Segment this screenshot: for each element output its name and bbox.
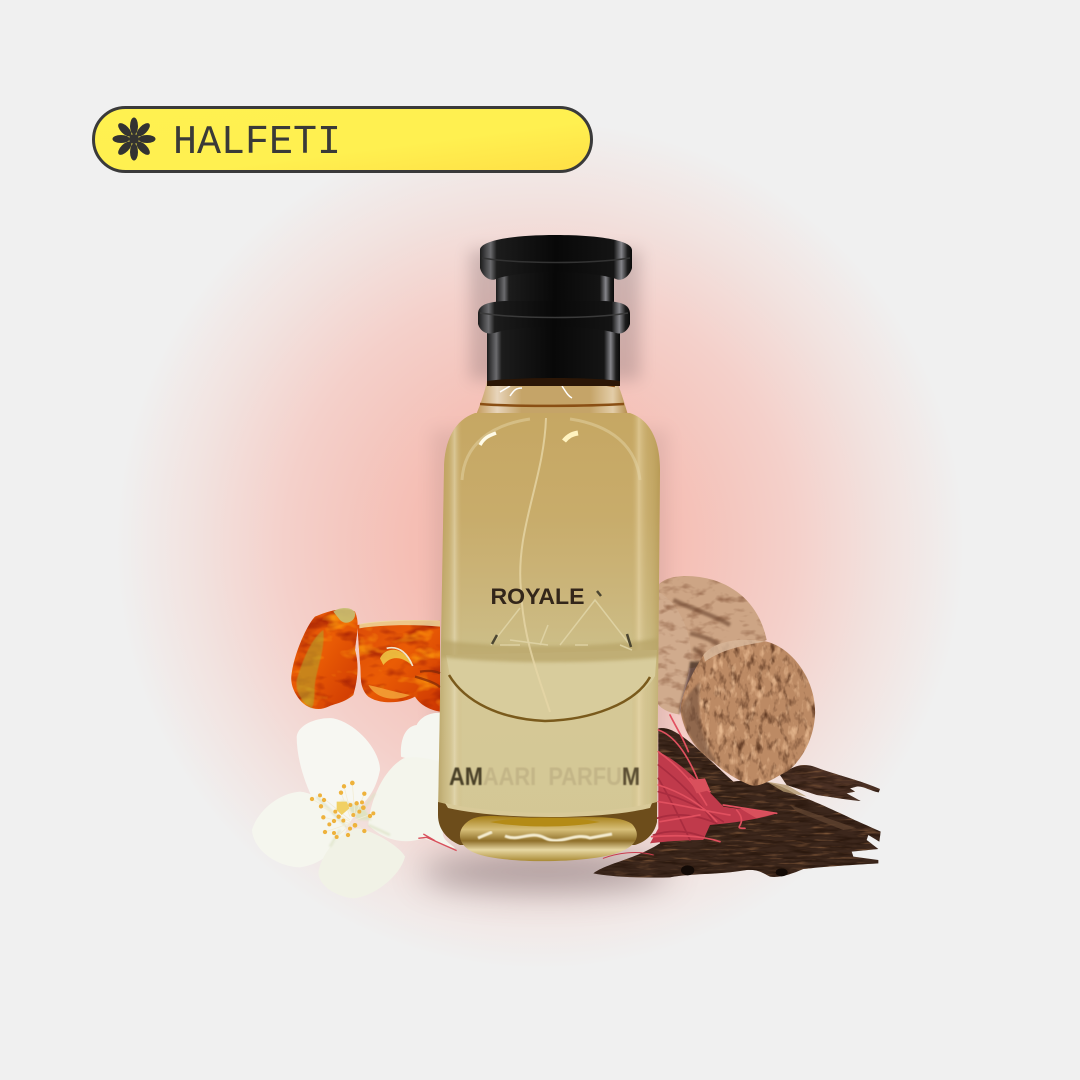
- background glow: [100, 110, 980, 980]
- bottle body: [436, 410, 662, 820]
- ingredient: amber: [291, 608, 440, 712]
- product name: ROYALE: [490, 584, 584, 609]
- nutmeg pieces: [658, 576, 815, 786]
- bottle shadow: [420, 250, 670, 892]
- title pill: HALFETI: [94, 108, 592, 172]
- ingredient: nutmeg, saffron, agarwood: [593, 576, 881, 878]
- liquid bowl curve: [446, 650, 657, 698]
- heading text: HALFETI: [173, 120, 341, 166]
- bottle cap: [478, 235, 632, 386]
- saffron threads: [603, 715, 777, 858]
- perfume bottle: [436, 235, 662, 861]
- spray tube: [520, 418, 550, 712]
- embossed logo: [491, 591, 632, 650]
- ingredient: jasmine flower: [252, 713, 457, 898]
- bottle base: [438, 802, 657, 845]
- icon: flower asterisk: [112, 118, 156, 160]
- agarwood: [593, 728, 881, 878]
- infographic canvas: [92, 106, 926, 932]
- bottle glass neck: [476, 381, 628, 415]
- embossed brand text: AMAARI PARFUM: [449, 763, 640, 791]
- stamens: [310, 781, 375, 839]
